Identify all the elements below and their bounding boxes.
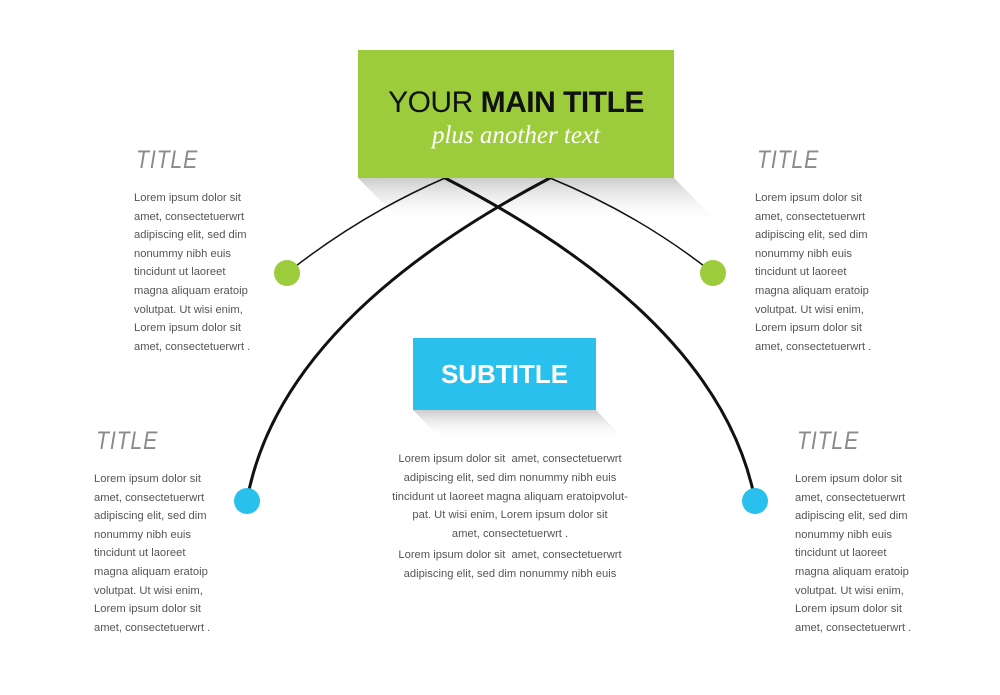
- panel: top right: TITLE: [757, 146, 819, 174]
- main title box: [358, 50, 674, 178]
- center text: adipiscing elit, sed dim nonummy nibh euis: [404, 568, 616, 580]
- panel: bottom right: Lorem ipsum dolor sit: [795, 473, 902, 485]
- panel: bottom left: Lorem ipsum dolor sit: [94, 603, 201, 615]
- panel: top left: Lorem ipsum dolor sit: [134, 192, 241, 204]
- dot green left: [274, 260, 300, 286]
- dot blue left: [234, 488, 260, 514]
- subheading: plus another text: [432, 122, 600, 149]
- panel: top left: Lorem ipsum dolor sit: [134, 322, 241, 334]
- panel: top left: TITLE: [136, 146, 198, 174]
- panel: bottom left: [94, 427, 210, 634]
- panel: top left: tincidunt ut laoreet: [134, 266, 225, 278]
- panel: bottom right: tincidunt ut laoreet: [795, 547, 886, 559]
- panel: top right: amet, consectetuerwrt .: [755, 341, 871, 353]
- panel: bottom left: adipiscing elit, sed dim: [94, 510, 207, 522]
- heading: YOUR MAIN TITLE: [388, 86, 644, 119]
- panel: bottom right: volutpat. Ut wisi enim,: [795, 585, 904, 597]
- panel: bottom left: volutpat. Ut wisi enim,: [94, 585, 203, 597]
- dot blue right: [742, 488, 768, 514]
- subtitle box: SUBTITLE: [441, 359, 568, 389]
- panel: bottom left: Lorem ipsum dolor sit: [94, 473, 201, 485]
- panel: bottom left: amet, consectetuerwrt: [94, 492, 204, 504]
- center text: tincidunt ut laoreet magna aliquam eratoipvolut-: [392, 491, 628, 503]
- center text: [392, 453, 628, 580]
- center text: amet, consectetuerwrt .: [452, 528, 568, 540]
- panel: top right: amet, consectetuerwrt: [755, 211, 865, 223]
- panel: top right: Lorem ipsum dolor sit: [755, 192, 862, 204]
- panel: bottom right: Lorem ipsum dolor sit: [795, 603, 902, 615]
- subtitle box: [413, 338, 596, 410]
- center text: Lorem ipsum dolor sit amet, consectetuerwrt: [398, 453, 622, 465]
- panel: top left: nonummy nibh euis: [134, 248, 231, 260]
- panel: bottom right: [795, 427, 911, 634]
- panel: bottom right: adipiscing elit, sed dim: [795, 510, 908, 522]
- panel: top left: magna aliquam eratoip: [134, 285, 248, 297]
- panel: top right: volutpat. Ut wisi enim,: [755, 304, 864, 316]
- panel: bottom right: amet, consectetuerwrt .: [795, 622, 911, 634]
- panel: bottom right: nonummy nibh euis: [795, 529, 892, 541]
- panel: top right: tincidunt ut laoreet: [755, 266, 846, 278]
- panel: top right: adipiscing elit, sed dim: [755, 229, 868, 241]
- panel: bottom right: TITLE: [797, 427, 859, 455]
- panel: bottom left: tincidunt ut laoreet: [94, 547, 185, 559]
- panel: bottom right: magna aliquam eratoip: [795, 566, 909, 578]
- panel: top right: nonummy nibh euis: [755, 248, 852, 260]
- dot green right: [700, 260, 726, 286]
- panel: top right: magna aliquam eratoip: [755, 285, 869, 297]
- panel: top left: amet, consectetuerwrt: [134, 211, 244, 223]
- panel: top left: [134, 146, 250, 353]
- panel: top right: [755, 146, 871, 353]
- panel: top left: amet, consectetuerwrt .: [134, 341, 250, 353]
- panel: bottom right: amet, consectetuerwrt: [795, 492, 905, 504]
- panel: bottom left: amet, consectetuerwrt .: [94, 622, 210, 634]
- panel: bottom left: nonummy nibh euis: [94, 529, 191, 541]
- center text: adipiscing elit, sed dim nonummy nibh euis: [404, 472, 616, 484]
- center text: pat. Ut wisi enim, Lorem ipsum dolor sit: [412, 509, 608, 521]
- panel: top right: Lorem ipsum dolor sit: [755, 322, 862, 334]
- panel: bottom left: magna aliquam eratoip: [94, 566, 208, 578]
- panel: top left: adipiscing elit, sed dim: [134, 229, 247, 241]
- center text: Lorem ipsum dolor sit amet, consectetuerwrt: [398, 549, 622, 561]
- panel: top left: volutpat. Ut wisi enim,: [134, 304, 243, 316]
- panel: bottom left: TITLE: [96, 427, 158, 455]
